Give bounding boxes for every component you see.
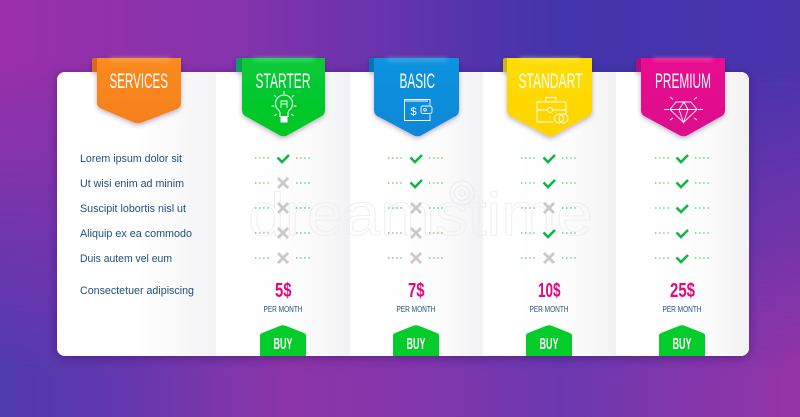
buy button: standart: BUY	[540, 336, 559, 353]
ribbon: services	[92, 58, 181, 123]
column marks: starter	[255, 155, 312, 263]
column marks: standart	[521, 155, 578, 263]
row labels	[80, 153, 194, 297]
buy button: basic: BUY	[406, 336, 426, 353]
buy button: starter: BUY	[274, 336, 293, 353]
column marks: premium	[655, 155, 711, 262]
pricing: standart: PER MONTH	[530, 305, 569, 314]
row labels: Suscipit lobortis nisl ut	[80, 203, 186, 215]
pricing: starter	[260, 280, 306, 356]
row labels: Consectetuer adipiscing	[80, 285, 194, 297]
row labels: Ut wisi enim ad minim	[80, 178, 184, 190]
icon: light bulb	[272, 91, 296, 122]
heading: premium: PREMIUM	[655, 70, 711, 93]
ribbon: basic	[369, 58, 459, 136]
pricing: standart: 10$	[538, 280, 560, 302]
pricing: premium	[659, 280, 705, 356]
column marks: basic	[388, 155, 445, 263]
row labels: Lorem ipsum dolor sit	[80, 153, 182, 165]
heading: basic: BASIC	[400, 70, 435, 93]
ribbon: premium	[636, 58, 725, 136]
ribbon: standart	[503, 58, 592, 136]
icon: diamond	[664, 97, 703, 122]
icon: briefcase with coins	[537, 98, 568, 123]
pricing: premium: PER MONTH	[662, 305, 702, 314]
pricing: starter: PER MONTH	[264, 305, 303, 314]
pricing: premium: 25$	[670, 280, 695, 302]
icon: wallet: $	[410, 106, 417, 118]
pricing: basic: 7$	[408, 280, 424, 302]
ribbon: starter	[236, 58, 325, 136]
panel: comparison table	[57, 72, 749, 356]
row labels: Aliquip ex ea commodo	[80, 228, 192, 240]
heading: starter: STARTER	[256, 70, 310, 93]
buy button: premium: BUY	[672, 336, 692, 353]
watermark: dreamstime	[248, 181, 593, 248]
pricing: basic	[393, 280, 439, 356]
pricing: basic: PER MONTH	[396, 305, 436, 314]
pricing: starter: 5$	[275, 280, 292, 302]
heading: services: SERVICES	[110, 70, 168, 93]
pricing: standart	[526, 280, 572, 356]
row labels: Duis autem vel eum	[80, 253, 172, 265]
heading: standart: STANDART	[518, 70, 583, 93]
